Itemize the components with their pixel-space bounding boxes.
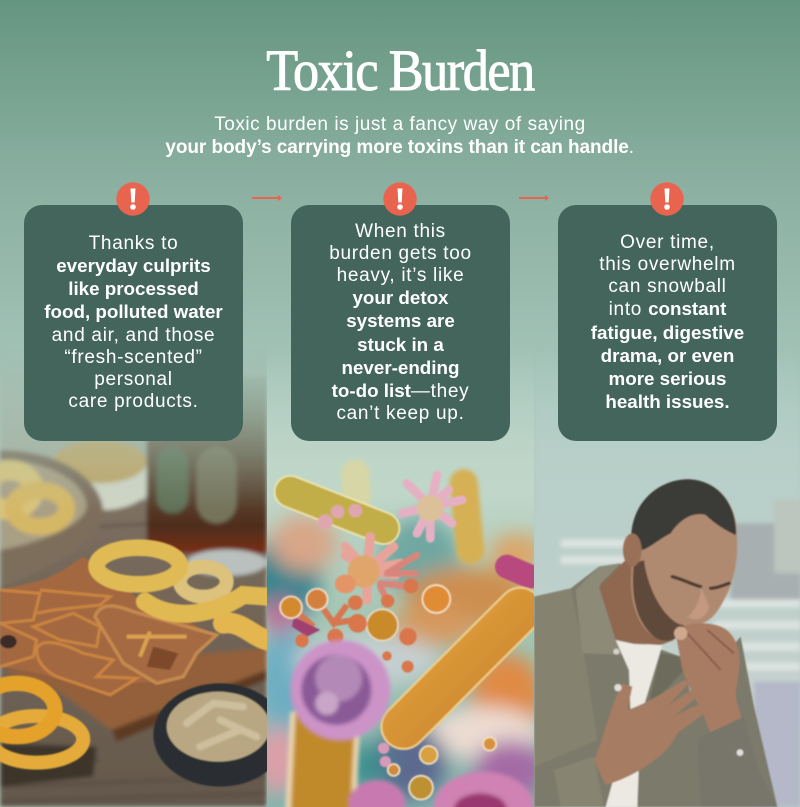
shirt <box>534 563 777 807</box>
panel: detox systems: stuck in a <box>357 334 444 355</box>
intro text <box>165 114 635 158</box>
panel: health effects: can snowball <box>608 276 727 297</box>
panel: health effects: this overwhelm <box>599 254 736 275</box>
panel: everyday culprits: personal <box>94 369 173 390</box>
hair <box>631 479 736 550</box>
pink spiky microbes <box>345 475 462 603</box>
fist and forearm <box>676 623 744 740</box>
panel: health effects: Over time, <box>620 232 715 253</box>
ear <box>623 533 642 567</box>
panel: everyday culprits: everyday culprits <box>56 255 211 276</box>
panel: health effects: drama, or even <box>601 345 734 366</box>
shirt cuff <box>709 718 744 740</box>
panel: health effects: fatigue, digestive <box>591 322 744 342</box>
panel: detox systems <box>291 205 510 441</box>
panel: health effects: health issues. <box>605 391 730 412</box>
icon: alert 3 <box>650 182 684 216</box>
panel: detox systems: heavy, it’s like <box>337 265 464 286</box>
panel: health effects: into constant <box>609 298 726 320</box>
panel: everyday culprits: “fresh-scented” <box>64 347 203 368</box>
icon: alert 1 <box>116 182 150 216</box>
panel: detox systems: systems are <box>346 310 455 331</box>
photo: man coughing with hand on chest <box>534 434 800 807</box>
photo: processed snack food on a wooden table <box>0 376 267 807</box>
panel: everyday culprits: care products. <box>68 391 199 412</box>
panel: detox systems: can’t keep up. <box>336 403 465 424</box>
panel: everyday culprits: like processed <box>68 278 199 299</box>
neck <box>599 557 674 645</box>
chest hand <box>594 680 707 785</box>
panel: health effects <box>558 205 777 441</box>
arrow 1 <box>252 195 282 201</box>
icon: alert 2 <box>383 182 417 216</box>
title: Toxic Burden <box>266 38 534 103</box>
panel: detox systems: When this <box>355 221 446 242</box>
panel: detox systems: burden gets too <box>329 243 472 264</box>
panel: everyday culprits: and air, and those <box>52 324 215 346</box>
panel: everyday culprits <box>24 205 243 441</box>
photo: microbes and toxins close-up <box>267 389 534 807</box>
panel: everyday culprits: Thanks to <box>89 233 178 254</box>
intro text: your body’s carrying more toxins than it can handle. <box>165 137 635 158</box>
t-shirt <box>606 640 662 807</box>
panel: detox systems: never-ending <box>342 357 459 378</box>
head <box>631 479 737 641</box>
panel: everyday culprits: food, polluted water <box>44 301 223 322</box>
panel: detox systems: to-do list—they <box>332 380 469 402</box>
intro text: Toxic burden is just a fancy way of saying <box>214 114 586 135</box>
arrow 2 <box>519 195 549 201</box>
panel: detox systems: your detox <box>352 287 448 308</box>
panel: health effects: more serious <box>609 368 726 389</box>
